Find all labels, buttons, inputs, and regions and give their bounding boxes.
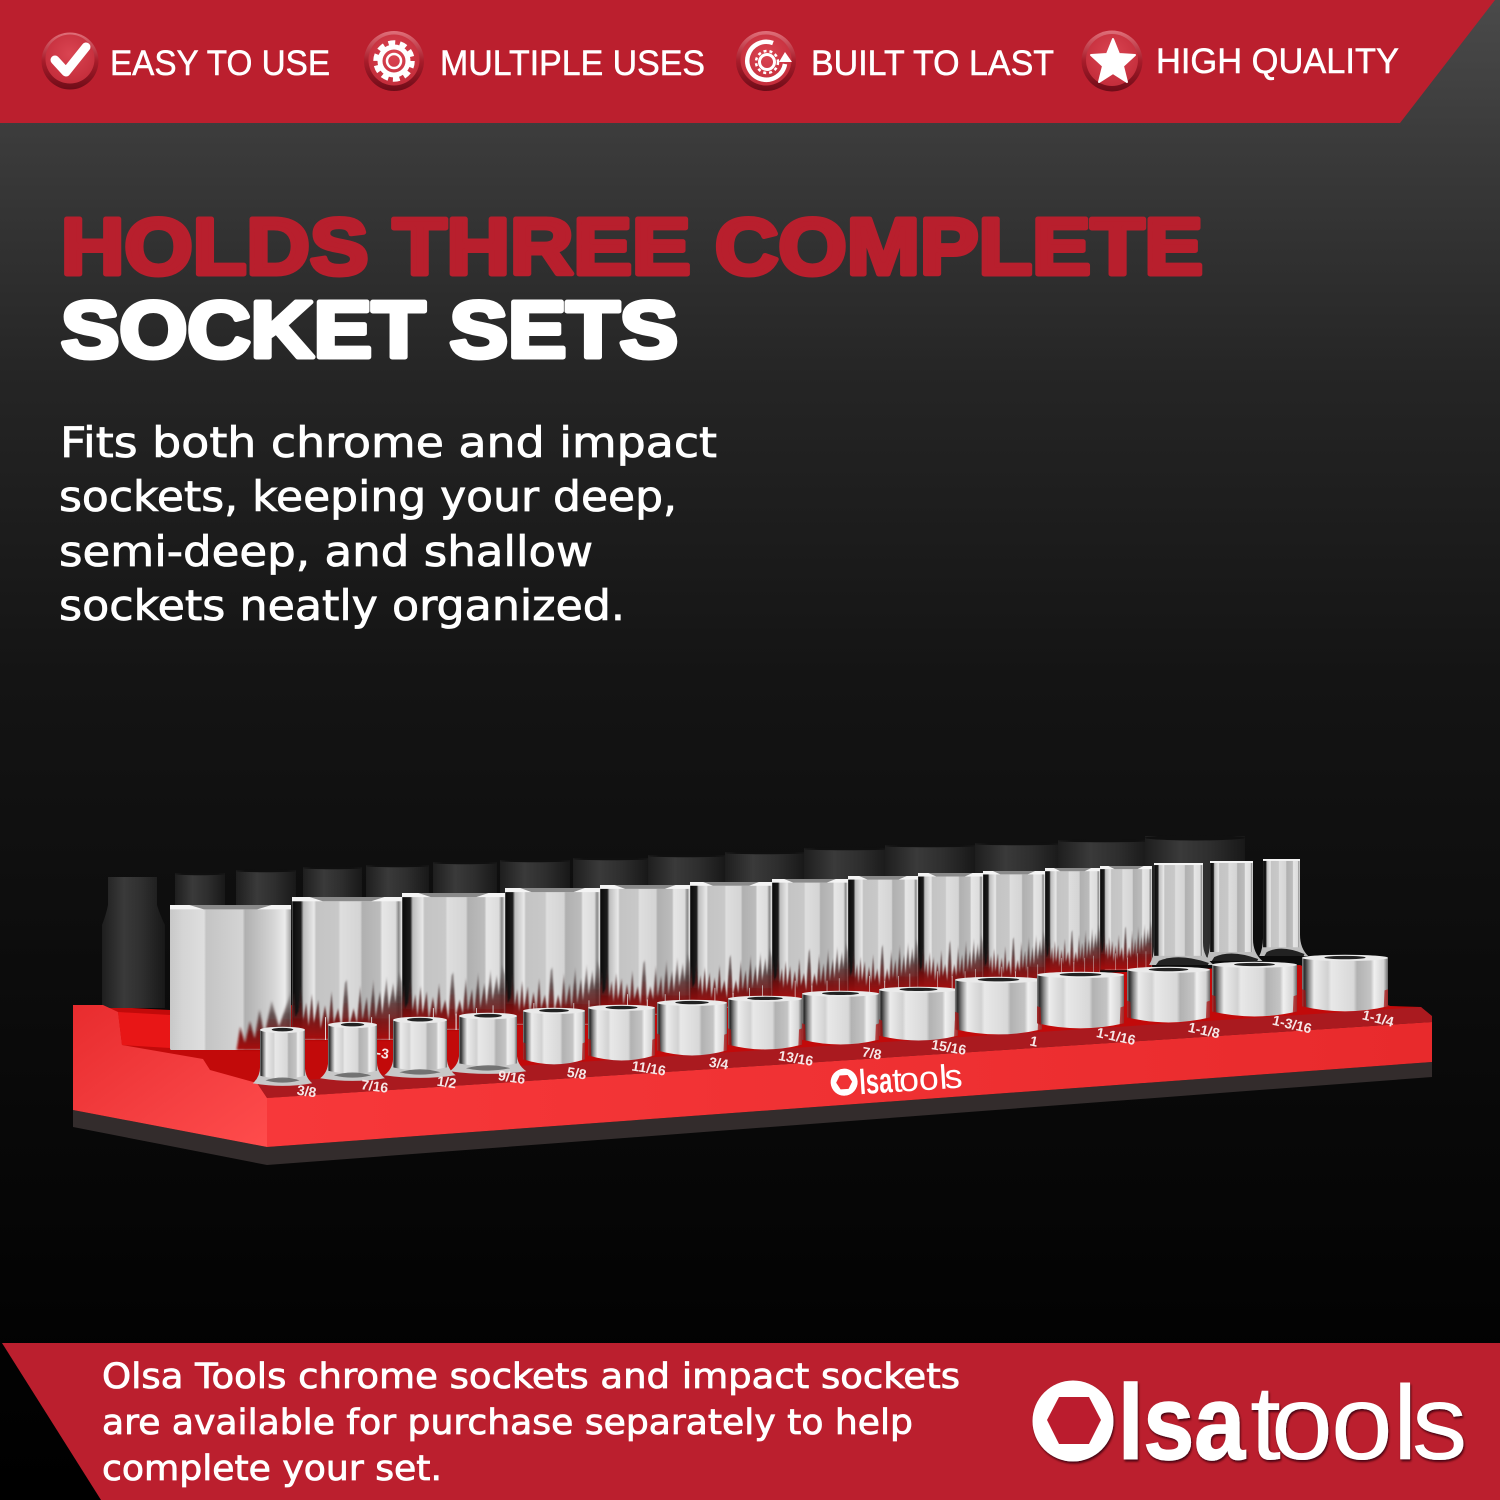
headline [61, 202, 1203, 374]
body text [59, 418, 717, 630]
size labels: 11/16 [631, 1057, 667, 1079]
bottom note [102, 1357, 960, 1489]
feature: built to last [736, 31, 1054, 91]
bottom note: Olsa Tools chrome sockets and impact sockets [102, 1357, 960, 1397]
tray front face [267, 1022, 1432, 1147]
tray left step face [73, 1005, 267, 1147]
icon: circular arrow with gear [736, 31, 796, 91]
brand logo: tools [1250, 1364, 1467, 1482]
tray top surface [73, 965, 1432, 1100]
icon: gear [364, 31, 424, 91]
feature: multiple uses [364, 31, 705, 91]
impact sockets: back row [175, 835, 1245, 956]
partial label: -3 [375, 1044, 390, 1062]
size labels: 13/16 [777, 1047, 815, 1069]
size labels: 9/16 [497, 1067, 527, 1087]
tray base [73, 1062, 1432, 1165]
icon: star [1082, 30, 1142, 92]
chrome sockets: middle row [170, 859, 1308, 1050]
size labels: 5/8 [566, 1064, 588, 1083]
label: EASY TO USE [110, 44, 330, 83]
size labels: 1-1/8 [1187, 1019, 1222, 1041]
size labels: 1/2 [436, 1073, 458, 1091]
label: MULTIPLE USES [440, 44, 705, 83]
size labels [296, 1007, 1396, 1100]
size labels: 3/8 [296, 1082, 318, 1100]
size labels: 1-3/16 [1271, 1012, 1313, 1036]
tray label strip [257, 1007, 1432, 1098]
body text: Fits both chrome and impact [60, 418, 717, 467]
bottom note: are available for purchase separately to help [102, 1403, 913, 1443]
brand logo [1032, 1360, 1467, 1483]
size labels: 15/16 [930, 1036, 968, 1058]
feature: easy to use [42, 32, 330, 90]
socket tray with sockets [73, 835, 1432, 1165]
tray logo: O [830, 1061, 858, 1104]
top banner [0, 0, 1495, 123]
chrome sockets: front row [253, 955, 1388, 1086]
bottom note: complete your set. [102, 1449, 442, 1489]
label: HIGH QUALITY [1156, 42, 1399, 81]
size labels: 7/16 [360, 1076, 390, 1096]
tray logo [829, 1055, 964, 1104]
label: BUILT TO LAST [811, 44, 1054, 83]
headline: SOCKET SETS [61, 285, 678, 374]
size labels: 7/8 [861, 1044, 883, 1063]
body text: semi-deep, and shallow [59, 527, 593, 576]
size labels: 1 [1029, 1032, 1040, 1050]
icon: check mark [42, 32, 98, 90]
body text: sockets neatly organized. [59, 581, 625, 630]
size labels: 1-1/16 [1095, 1024, 1137, 1048]
tray logo: tools [891, 1057, 964, 1100]
brand logo: O [1032, 1360, 1113, 1483]
size labels: 1-1/4 [1361, 1007, 1396, 1030]
brand logo: lsa [1118, 1364, 1246, 1482]
tray recess [118, 1012, 170, 1048]
feature: high quality [1082, 30, 1399, 92]
body text: sockets, keeping your deep, [59, 472, 677, 521]
size labels: 3/4 [708, 1054, 730, 1073]
tray logo: lsa [858, 1061, 894, 1102]
headline: HOLDS THREE COMPLETE [61, 202, 1203, 291]
impact socket: left end [102, 877, 165, 1008]
bottom banner [2, 1343, 1500, 1500]
